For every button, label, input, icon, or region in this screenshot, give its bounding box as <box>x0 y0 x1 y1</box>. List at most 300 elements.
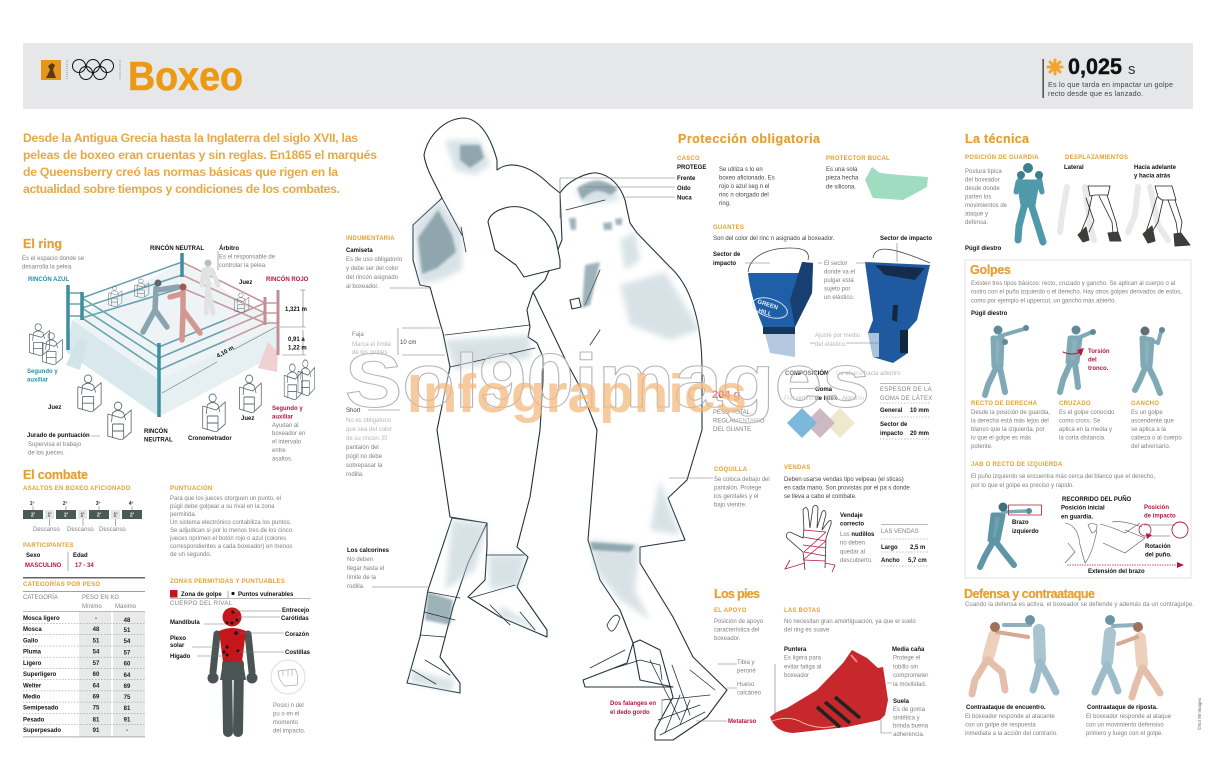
text: cruzado: aplica en la media y <box>1059 427 1112 433</box>
label: segundo y auxiliar rojo: asaltos. <box>272 456 293 462</box>
label: segundo y auxiliar rojo: auxiliar <box>272 414 294 420</box>
title: Boxeo <box>128 53 243 99</box>
guantes: pulgar está <box>824 278 854 284</box>
body labels: Corazón <box>285 632 309 638</box>
guantes: Ajuste por medio <box>815 333 861 339</box>
los pies: Puntera <box>784 647 807 653</box>
panel: indumentaria: INDUMENTARIA <box>346 236 395 242</box>
panel: el ring <box>22 237 315 462</box>
icon: asterisk <box>1048 60 1062 74</box>
label: segundo y auxiliar rojo: boxeador en <box>272 431 305 437</box>
heading: los pies: Los pies <box>714 587 760 601</box>
text: recto de derecha: la derecha está más lejos del <box>971 418 1049 424</box>
composición: De afuera hacia adentro <box>836 371 901 377</box>
los pies: Posición de apoyo <box>714 619 764 625</box>
text: encuentro: Contraataque de encuentro. <box>966 705 1046 711</box>
casco: rinc n otorgado del <box>719 192 769 198</box>
label: cronometrador: Cronometrador <box>188 436 232 442</box>
text: recto de derecha: lo que el golpe es más <box>971 436 1031 442</box>
boxer left <box>407 118 566 693</box>
composición: Algodón <box>842 396 864 402</box>
figures: riposta <box>1095 615 1160 697</box>
vendas: correcto <box>840 522 864 528</box>
text: jab: El puño izquierdo se encuentra más cerca del blanco que el derecho, <box>971 474 1155 480</box>
table: categorías por peso: Semipesado <box>23 706 59 712</box>
los pies: EL APOYO <box>714 608 747 614</box>
text: short: No es obligatorio <box>346 418 392 424</box>
body labels <box>170 608 311 660</box>
label: rincón neutral: RINCÓN NEUTRAL <box>150 244 204 252</box>
los pies: calcáneo <box>737 691 762 697</box>
los pies: adherencia. <box>893 732 925 738</box>
rounds diagram: 3º <box>96 501 100 507</box>
figure: guard stance <box>1016 163 1043 242</box>
label: 10 cm: 10 cm <box>400 340 416 346</box>
los pies: Es ligera para <box>784 656 822 662</box>
stairs <box>66 338 87 370</box>
table: categorías por peso: 81 <box>93 718 100 724</box>
fist path diagram <box>1061 496 1188 575</box>
casco: PROTEGE <box>677 165 706 171</box>
guantes: del elástico. <box>815 342 847 348</box>
text: cruzado: CRUZADO <box>1059 401 1091 407</box>
text: short: sobrepasar la <box>346 463 383 469</box>
text: short: púgil no debe <box>346 454 383 460</box>
los pies: Es de goma <box>893 707 926 713</box>
los pies: LAS BOTAS <box>784 608 820 614</box>
guantes: donde va el <box>824 270 855 276</box>
table: categorías por peso: 57 <box>124 650 131 656</box>
composición: COMPOSICIÓN <box>785 369 828 377</box>
label: jurado de puntuación: Jurado de puntuación <box>27 433 90 439</box>
credit: ©Sol 90 Images <box>1196 697 1202 730</box>
rounds diagram: Descanso <box>33 527 60 533</box>
rounds diagram: 1' <box>114 512 117 518</box>
vendas: Ancho <box>881 558 900 564</box>
table: categorías por peso: 60 <box>93 672 100 678</box>
protector bucal: pieza hecha <box>826 176 859 182</box>
stat: punch speed: Es lo que tarda en impactar un golpe <box>1048 80 1173 89</box>
intro text: peleas de boxeo eran cruentas y sin reglas. En1865 el marqués <box>23 148 377 162</box>
label: torsión: Torsión <box>1088 349 1110 355</box>
text: recto de derecha: Desde la posición de guardia, <box>971 410 1050 416</box>
text: ring description: desarrolla la pelea. <box>22 264 73 270</box>
panel: la técnica <box>965 132 1190 252</box>
text: golpes intro: Existen tres tipos básicos: recto, cruzado y gancho. Se aplican al cuerpo o al <box>971 281 1175 287</box>
panel: protección obligatoria <box>610 132 933 738</box>
protector bucal: PROTECTOR BUCAL <box>826 156 890 162</box>
table: espesor: impacto <box>880 431 903 437</box>
rounds diagram: 2' <box>130 512 134 518</box>
table: categorías por peso: 91 <box>93 728 100 734</box>
table: categorías por peso: Medio <box>23 694 41 700</box>
fist path diagram: Extensión del brazo <box>1088 569 1145 575</box>
posición de guardia: parten los <box>965 194 991 200</box>
participantes <box>23 543 94 571</box>
casco: ring. <box>719 201 731 207</box>
heading: el ring: El ring <box>23 237 62 251</box>
panel: golpes: Púgil diestro <box>971 311 1008 317</box>
weight callout: DEL GUANTE <box>713 427 751 433</box>
guantes: Son del color del rinc n asignado al boxeador. <box>713 236 835 242</box>
text: gancho: ascendente que <box>1131 418 1174 424</box>
figure: gancho <box>1135 326 1165 393</box>
guantes: un elástico. <box>824 295 855 301</box>
los pies: Hueso <box>737 682 755 688</box>
figure: jab <box>980 502 1042 567</box>
vendas: Vendaje <box>840 513 863 519</box>
los pies: la movilidad. <box>893 682 927 688</box>
los pies: Suela <box>893 699 910 705</box>
protector bucal: Es una sola <box>826 167 858 173</box>
glove front <box>748 248 813 357</box>
table: espesor: GOMA DE LÁTEX <box>880 395 933 402</box>
vendas: nudillos <box>851 532 875 538</box>
glove back <box>865 249 930 363</box>
text: golpes intro: rostro con el puño izquierdo o el derecho. Hay otros golpes derivados de estos, <box>971 290 1182 296</box>
posición de guardia: POSICIÓN DE GUARDIA <box>965 153 1039 161</box>
legs: lateral <box>1060 186 1121 242</box>
label: 4,10 m: 4,10 m <box>216 345 235 360</box>
text: cruzado: Es el golpe conocido <box>1059 410 1115 416</box>
panel: golpes <box>965 260 1191 578</box>
protector bucal: de silicona. <box>826 184 856 190</box>
los pies: Protege el <box>893 656 920 662</box>
body labels: Plexo <box>170 636 186 642</box>
text: fist position: Posici n del <box>273 703 304 709</box>
los pies: Dos falanges en <box>610 701 656 707</box>
composición: de látex <box>815 396 838 402</box>
text: riposta: Contraataque de riposta. <box>1087 705 1158 711</box>
text: short: pantalón del <box>346 445 379 451</box>
posición de guardia: desde donde <box>965 186 1000 192</box>
casco: Oído <box>677 186 691 192</box>
los pies: evitar fatiga al <box>784 664 821 670</box>
ropes <box>68 262 225 370</box>
text: puntuación: de un segundo. <box>170 552 212 558</box>
label: segundo y auxiliar rojo: Segundo y <box>272 406 303 412</box>
table: categorías por peso: 91 <box>124 718 131 724</box>
label: jurado de puntuación: Supervisa el trabajo <box>28 442 82 448</box>
casco: rojo o azul seg n el <box>719 184 769 190</box>
table: categorías por peso <box>23 577 145 737</box>
text: puntuación: Un sistema electrónico contabiliza los puntos. <box>170 520 292 526</box>
legs: adelante y atrás <box>1128 186 1190 246</box>
weight callout: REGLAMENTARIO <box>713 418 765 424</box>
coquilla: pantalón. Protege <box>714 486 762 492</box>
rounds diagram: ASALTOS EN BOXEO AFICIONADO <box>23 486 131 492</box>
fist path diagram: del puño. <box>1145 553 1172 559</box>
vendas: quedar al <box>840 549 865 555</box>
text: cruzado: como cross. Se <box>1059 418 1101 424</box>
table: categorías por peso: Superpesado <box>23 728 61 734</box>
los pies <box>610 587 929 738</box>
text: faja: Faja <box>352 332 364 338</box>
los pies: No necesitan gran amortiguación, ya que el suelo <box>784 619 916 625</box>
label: juez izquierda: Juez <box>48 405 61 411</box>
label: segundo y auxiliar rojo: entre <box>272 448 286 454</box>
text: camiseta: del rincón asignado <box>346 275 399 281</box>
rounds diagram: 1º <box>30 501 34 507</box>
vendas: VENDAS <box>784 465 811 471</box>
stat: punch speed <box>1042 54 1173 98</box>
rounds diagram: 2' <box>64 512 68 518</box>
coquilla: Se coloca debajo del <box>714 477 770 483</box>
text: gancho: GANCHO <box>1131 401 1159 407</box>
text: puntuación: Se adjudican si por lo menos tres de los cinco <box>170 528 293 534</box>
intro text <box>23 131 377 196</box>
label: árbitro: Es el responsable de <box>219 254 276 260</box>
posición de guardia: Postura típica <box>965 169 1002 175</box>
text: riposta: El boxeador responde al ataque <box>1086 714 1172 720</box>
casco: CASCO <box>677 156 700 162</box>
los pies: boxeador <box>784 673 809 679</box>
label: 0,91 a 1,22 m: 1,22 m <box>288 346 307 352</box>
glove front: GREEN <box>756 299 779 311</box>
label: brazo izquierdo: izquierdo <box>1012 529 1039 535</box>
label: torsión: del <box>1088 358 1097 364</box>
panel: indumentaria <box>346 236 416 590</box>
boot <box>770 650 888 733</box>
table: categorías por peso: - <box>95 616 97 622</box>
posición de guardia: movimientos de <box>965 203 1008 209</box>
fist path diagram: Rotación <box>1145 544 1171 550</box>
table: categorías por peso: Mínimo <box>82 604 102 610</box>
table: categorías por peso: 69 <box>124 684 131 690</box>
dimension lines <box>91 251 306 436</box>
text: camiseta: Camiseta <box>346 248 373 254</box>
text: short: rodilla. <box>346 472 364 478</box>
guantes: Sector de <box>713 252 741 258</box>
text: short: Short <box>346 408 361 414</box>
desplazamientos <box>1060 155 1190 246</box>
fist path diagram: en guardia. <box>1061 514 1093 520</box>
coquilla: bajo vientre. <box>714 502 747 508</box>
coquilla <box>714 467 770 508</box>
vendas: 2,5 m <box>910 545 925 551</box>
composición: Piel sintética <box>784 396 818 402</box>
zonas permitidas: Zona de golpe <box>181 592 222 598</box>
text: camiseta: Es de uso obligatorio <box>346 257 403 263</box>
guantes: impacto <box>713 261 736 267</box>
participantes: 17 - 34 <box>75 563 94 569</box>
text: gancho: se aplica a la <box>1131 427 1167 433</box>
figures: encuentro <box>972 615 1056 694</box>
guide lines <box>368 178 775 721</box>
rounds diagram: Descanso <box>67 527 94 533</box>
text: camiseta: y debe ser del color <box>346 266 398 272</box>
guantes: GUANTES <box>713 225 744 231</box>
zonas permitidas: ZONAS PERMITIDAS Y PUNTUABLES <box>170 579 285 585</box>
table: espesor <box>880 383 933 439</box>
table: espesor: General <box>880 408 903 414</box>
table: categorías por peso: 54 <box>124 639 131 645</box>
participantes: Sexo <box>26 553 41 559</box>
text: riposta: con un movimiento defensivo <box>1086 722 1164 728</box>
glove front: HILL <box>757 308 772 318</box>
text: gancho: del adversario. <box>1131 444 1171 450</box>
rounds diagram <box>23 486 142 533</box>
stat: punch speed: s <box>1128 61 1136 78</box>
body labels: solar <box>170 643 185 649</box>
weight callout <box>712 389 765 433</box>
posición de guardia: Púgil diestro <box>965 246 1002 252</box>
desplazamientos: DESPLAZAMIENTOS <box>1065 155 1128 161</box>
composición <box>784 369 901 438</box>
body labels: Costillas <box>285 650 311 656</box>
body chart <box>192 608 284 732</box>
posición de guardia: ataque y <box>965 212 988 218</box>
label: segundo y auxiliar azul: auxiliar <box>27 377 49 383</box>
protector bucal <box>826 156 928 200</box>
rounds diagram: Descanso <box>99 527 126 533</box>
intro text: de Queensberry creó las normas básicas que rigen en la <box>23 165 338 179</box>
table: categorías por peso: CATEGORÍA <box>23 594 58 601</box>
icon: fist <box>271 660 305 694</box>
corner posts <box>68 253 278 417</box>
guantes: El sector <box>824 261 847 267</box>
table: categorías por peso: 81 <box>124 706 131 712</box>
text: fist position: pu o en el <box>273 712 299 718</box>
fist path diagram: Posición <box>1144 505 1169 511</box>
guantes: sujeto por <box>824 286 850 292</box>
table: categorías por peso: Pesado <box>23 718 45 724</box>
label: 1,321 m: 1,321 m <box>285 307 307 313</box>
posición de guardia: del boxeador <box>965 178 1000 184</box>
text: puntuación: correspondientes a cada boxeador) en menos <box>170 544 292 550</box>
rounds diagram: 4º <box>129 501 133 507</box>
label: jurado de puntuación: de los jueces. <box>28 450 65 456</box>
participantes: PARTICIPANTES <box>23 543 74 549</box>
zonas permitidas: Puntos vulnerables <box>238 592 294 598</box>
body labels: Mandíbula <box>170 620 200 626</box>
desplazamientos: y hacia atrás <box>1134 174 1171 180</box>
stat: punch speed: recto desde que es lanzado. <box>1048 89 1143 98</box>
zonas permitidas: CUERPO DEL RIVAL <box>170 601 233 607</box>
text: encuentro: El boxeador responde al atacante <box>965 714 1055 720</box>
casco: boxeo aficionado. Es <box>719 176 775 182</box>
text: gancho: cabeza o al cuerpo <box>1131 436 1182 442</box>
text: recto de derecha: RECTO DE DERECHA <box>971 401 1038 407</box>
label: brazo izquierdo: Brazo <box>1012 520 1029 526</box>
text: riposta: primero y luego con el golpe. <box>1086 731 1163 737</box>
header band <box>23 43 1193 109</box>
label: 0,91 a 1,22 m: 0,91 a <box>288 337 305 343</box>
panel: defensa y contraataque <box>964 587 1202 737</box>
text: fist position: momento <box>273 720 299 726</box>
table: espesor: 10 mm <box>910 408 929 414</box>
casco: Nuca <box>677 196 692 202</box>
text: camiseta: al boxeador. <box>346 284 379 290</box>
body labels: Hígado <box>170 654 191 660</box>
los pies: el dedo gordo <box>610 710 650 716</box>
watermark: Infographics <box>407 364 747 424</box>
label: rincón neutral frontal: RINCÓN <box>144 427 168 435</box>
participantes: MASCULINO <box>25 563 62 569</box>
table: categorías por peso: Mosca <box>23 627 42 633</box>
text: puntuación: púgil debe golpear a su rival en la zona <box>170 504 275 510</box>
panel: el combate <box>23 468 311 737</box>
los pies: Media caña <box>892 647 925 653</box>
vendas: descubierto. <box>840 558 873 564</box>
figure: cruzado <box>1060 326 1096 392</box>
icon: wrapped hand <box>785 505 835 572</box>
figure: recto de derecha <box>985 325 1029 395</box>
heading: golpes: Golpes <box>970 263 1011 277</box>
los pies: característica del <box>714 628 759 634</box>
los pies: tobillo sin <box>893 664 918 670</box>
vendas: Largo <box>881 545 898 551</box>
table: categorías por peso: 69 <box>93 694 100 700</box>
text: encuentro: con un golpe de respuesta <box>965 722 1036 728</box>
label: rincón azul: RINCÓN AZUL <box>28 275 69 283</box>
table: categorías por peso: 75 <box>124 695 131 701</box>
icon: olympic rings <box>72 60 114 80</box>
zonas permitidas <box>170 579 311 734</box>
text: short: de su rincón. El <box>346 436 387 442</box>
casco: Se utiliza s lo en <box>719 167 763 173</box>
table: categorías por peso: Pluma <box>23 650 42 656</box>
watermark: Sol90images <box>345 339 870 424</box>
guantes: Sector de impacto <box>880 236 932 242</box>
intro text: actualidad sobre tiempos y condiciones de los combates. <box>23 182 340 196</box>
fist path diagram: de impacto <box>1144 514 1176 520</box>
desplazamientos: Lateral <box>1064 165 1084 171</box>
text: short: que sea del color <box>346 427 392 433</box>
table: categorías por peso: 64 <box>124 673 131 679</box>
guantes <box>713 225 932 363</box>
text: faja: Marca el límite <box>352 342 392 348</box>
text: recto de derecha: potente. <box>971 444 993 450</box>
text: faja: de los golpes <box>352 350 387 356</box>
weight callout: 204 g <box>712 389 740 401</box>
text: jab: JAB O RECTO DE IZQUIERDA <box>971 462 1063 468</box>
text: cruzado: la corta distancia. <box>1059 436 1106 442</box>
vendas: LAS VENDAS <box>881 529 919 535</box>
text: encuentro: inmediata a la acción del contrario. <box>965 731 1058 737</box>
table: espesor: 20 mm <box>910 431 929 437</box>
text: jab: por lo que el golpe es preciso y rápido. <box>971 483 1074 489</box>
table: categorías por peso: 48 <box>124 618 131 624</box>
table: categorías por peso: - <box>126 728 128 734</box>
casco: Frente <box>677 176 696 182</box>
heading: defensa: Defensa y contraataque <box>964 587 1095 601</box>
rounds diagram: 1' <box>48 512 51 518</box>
label: juez derecha: Juez <box>241 416 254 422</box>
los pies: del ring es suave <box>784 628 830 634</box>
los pies: Tibia y <box>737 660 754 666</box>
label: árbitro: controlar la pelea. <box>219 263 267 269</box>
text: calcetines: llegar hasta el <box>347 566 384 572</box>
text: puntuación: PUNTUACIÓN <box>170 484 212 492</box>
vendas: Deben usarse vendas tipo velpeau (el sticas) <box>784 477 904 483</box>
text: calcetines: No deben <box>347 557 373 563</box>
label: segundo y auxiliar rojo: el intervalo <box>272 440 302 446</box>
table: categorías por peso: 51 <box>124 628 131 634</box>
text: calcetines: Los calcorines <box>347 548 390 554</box>
coquilla: los genitales y el <box>714 494 758 500</box>
table: categorías por peso: Gallo <box>23 638 38 644</box>
los pies: comprometer <box>893 673 928 679</box>
table: categorías por peso: CATEGORÍAS POR PESO <box>23 580 100 588</box>
vendas: en cada mano. Son provistas por el pa s donde <box>784 486 910 492</box>
los pies: Metatarso <box>728 719 757 725</box>
casco <box>677 156 775 207</box>
text: calcetines: rodilla. <box>347 584 365 590</box>
ring boxers and referee <box>143 260 218 340</box>
label: segundo y auxiliar rojo: Ayudan al <box>272 423 299 429</box>
icon: mouthguard <box>865 167 928 200</box>
